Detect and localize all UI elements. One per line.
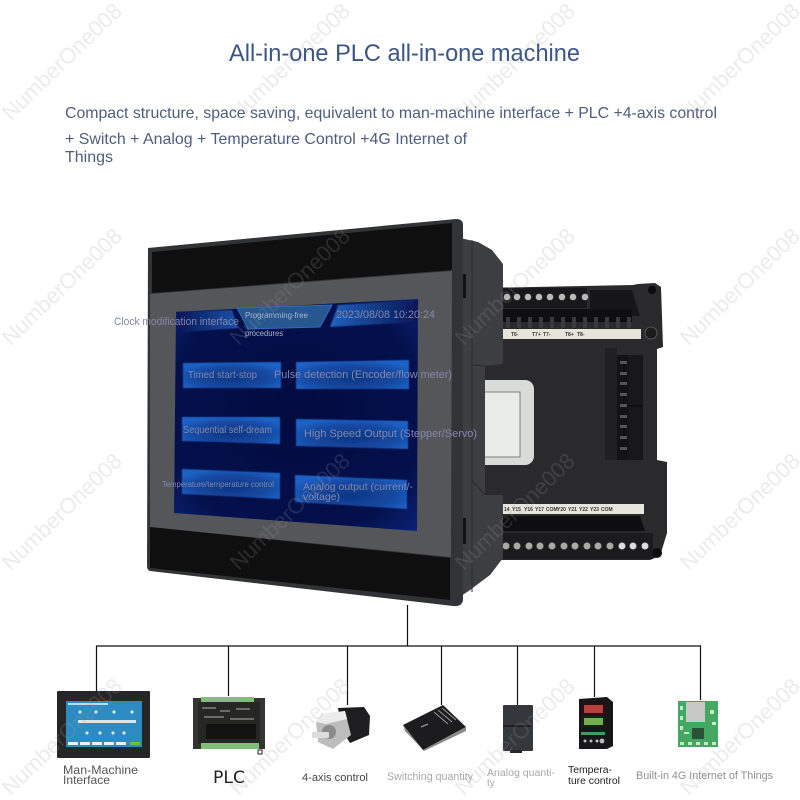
screen text labels: Clock modification interface (114, 316, 239, 328)
screen text labels: Timed start-stop (188, 370, 257, 381)
icon: stepper motor (312, 707, 370, 749)
screen text labels: Pulse detection (Encoder/flow meter) (274, 369, 452, 381)
gray bezel (150, 271, 452, 557)
watermark pattern: NumberOne008 (225, 673, 355, 800)
product: PLC rear controller body: T7- (543, 332, 551, 338)
icon: 4G module (678, 701, 718, 747)
product: PLC rear controller body: Y20 (557, 507, 566, 513)
screen text labels: Programming-free (245, 311, 309, 320)
right connector column (605, 348, 617, 460)
DIN window (470, 380, 534, 465)
screen header tabs (177, 300, 418, 332)
product: PLC rear controller body: Y15 (512, 507, 521, 513)
screen text labels: 2023/08/08 10:20:24 (336, 309, 435, 321)
screen text labels: High Speed Output (Stepper/Servo) (304, 428, 477, 440)
top label strip (503, 329, 641, 339)
watermark pattern: NumberOne008 (0, 448, 127, 575)
top screws (504, 294, 588, 300)
icon: man-machine interface (57, 691, 150, 758)
screen (174, 299, 418, 531)
icon: switching quantity module (403, 705, 466, 751)
screen text labels (114, 309, 477, 503)
product: PLC rear controller body: T7+ (532, 332, 541, 338)
watermark pattern: NumberOne008 (450, 448, 580, 575)
screen text labels: procedures (245, 329, 283, 338)
labels under icons: ty (487, 778, 495, 789)
intro text block (65, 105, 717, 166)
product: PLC rear controller body: Y23 (590, 507, 599, 513)
watermark pattern: NumberOne008 (225, 223, 355, 350)
intro text block: + Switch + Analog + Temperature Control +4G Internet of (65, 131, 468, 148)
product: PLC rear controller body: T8+ (565, 332, 574, 338)
bottom black band (150, 527, 450, 600)
product: PLC rear controller body: Y22 (579, 507, 588, 513)
product: PLC rear controller body: Y17 (535, 507, 544, 513)
screen buttons (182, 360, 409, 509)
product: front panel (147, 219, 463, 606)
watermark pattern: NumberOne008 (225, 448, 355, 575)
watermark pattern: NumberOne008 (0, 223, 127, 350)
watermark pattern: NumberOne008 (450, 0, 580, 125)
watermark pattern: NumberOne008 (225, 0, 355, 125)
product: PLC rear controller body: COM (601, 507, 613, 513)
icon: PLC board (193, 697, 265, 754)
intro text block: Things (65, 149, 113, 166)
screen text labels: voltage) (303, 491, 340, 503)
bottom terminal block (503, 533, 653, 559)
product: PLC rear controller body: T8- (577, 332, 585, 338)
labels under icons (63, 763, 773, 789)
title: All-in-one PLC all-in-one machine (229, 40, 580, 67)
labels under icons: Interface (63, 773, 110, 787)
labels under icons: Analog quanti- (487, 768, 555, 779)
bottom fins (503, 516, 645, 531)
screen text labels: Analog output (current/- (303, 481, 414, 493)
watermark pattern: NumberOne008 (450, 223, 580, 350)
product: PLC rear controller body (470, 283, 667, 560)
labels under icons: ture control (568, 776, 620, 787)
icon: analog quantity module (503, 705, 533, 753)
labels under icons: Built-in 4G Internet of Things (636, 770, 773, 782)
icon: temperature controller (579, 697, 613, 749)
intro text block: Compact structure, space saving, equivalent to man-machine interface + PLC +4-axis control (65, 105, 717, 122)
product: PLC rear controller body: 14 (504, 507, 510, 513)
top black band (152, 223, 452, 293)
product: PLC rear controller body: COM (546, 507, 558, 513)
screen text labels: Temperature/temperature control (162, 480, 274, 489)
labels under icons: Tempera- (568, 765, 612, 776)
labels under icons: PLC (213, 768, 245, 788)
product: PLC rear controller body: Y16 (524, 507, 533, 513)
product: PLC rear controller body: T6- (511, 332, 519, 338)
labels under icons: Switching quantity (387, 771, 473, 783)
watermark pattern: NumberOne008 (450, 673, 580, 800)
connector tree lines (96, 605, 700, 705)
product: side housing (455, 238, 503, 600)
screen text labels: Sequential self-dream (183, 425, 272, 436)
product: PLC rear controller body: Y21 (568, 507, 577, 513)
top fins (503, 309, 632, 322)
bottom label strip (503, 504, 644, 514)
labels under icons: Man-Machine (63, 763, 138, 777)
watermark pattern: NumberOne008 (0, 673, 127, 800)
labels under icons: 4-axis control (302, 772, 368, 784)
